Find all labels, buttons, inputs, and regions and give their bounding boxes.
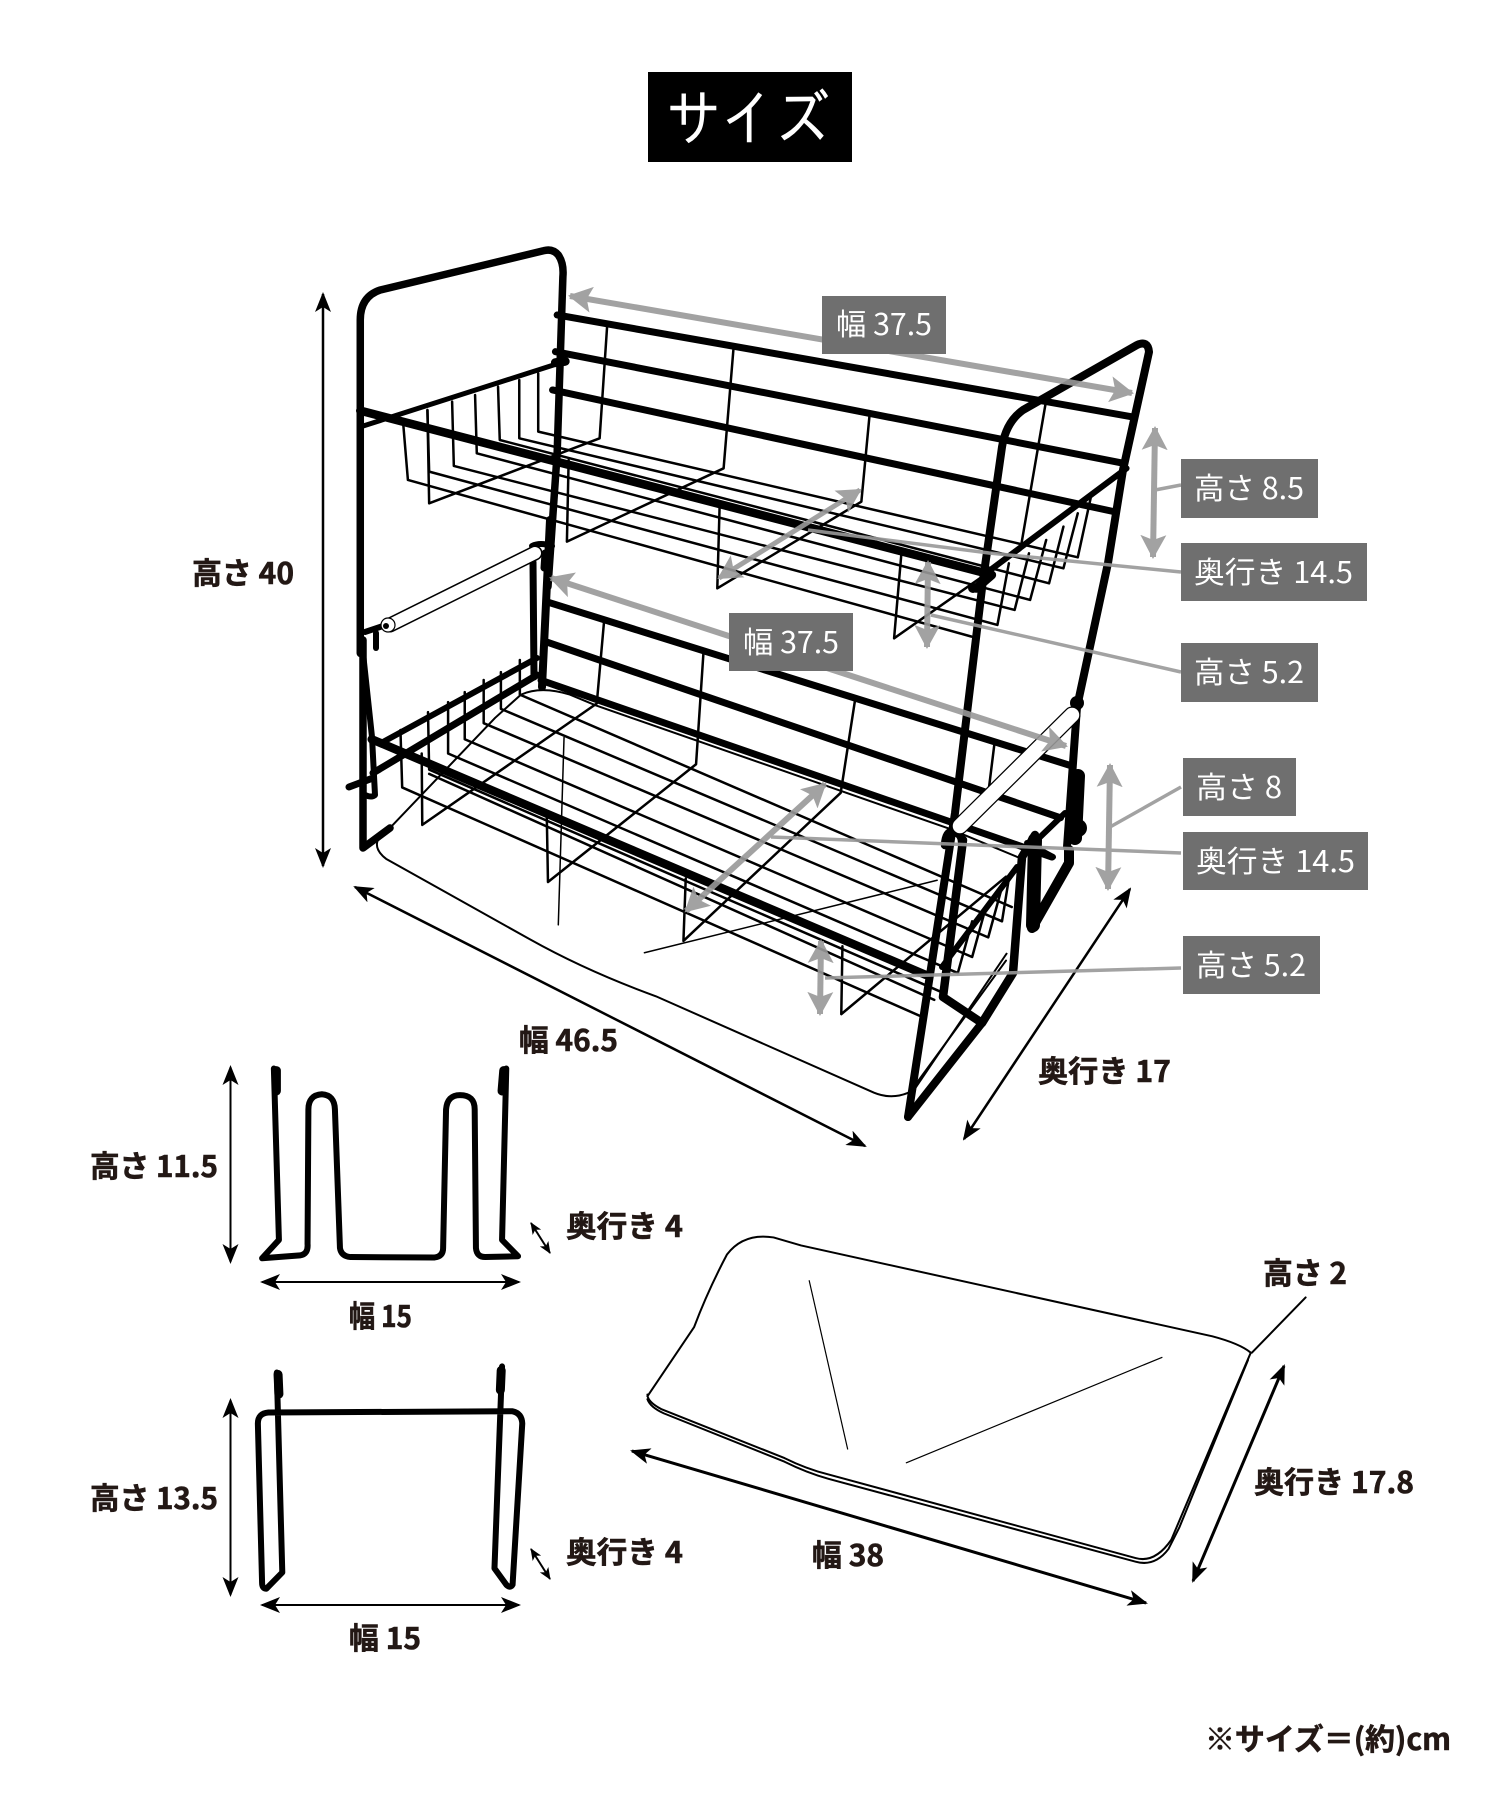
label: width 37.5 lower <box>729 613 853 671</box>
tray with dimensions <box>632 1237 1414 1603</box>
bracket B drawing <box>258 1366 522 1589</box>
label: depth 14.5 upper: 奥行き 14.5 <box>1194 548 1353 592</box>
label: width 37.5 upper: 幅 37.5 <box>836 300 932 344</box>
dimension: height 40: 高さ 40 <box>192 549 294 593</box>
label: depth 14.5 upper <box>1181 543 1367 601</box>
label: height 5.2 upper <box>1181 643 1318 702</box>
title: サイズ <box>666 86 830 148</box>
left frame and side bars <box>349 520 552 848</box>
label: height 8: 高さ 8 <box>1196 763 1282 807</box>
label: height 8.5 <box>1181 459 1318 518</box>
right frame <box>908 344 1149 1117</box>
bracket A with dimensions: 奥行き 4 <box>566 1202 683 1246</box>
gray dimension arrows <box>551 296 1181 1014</box>
right frame joints <box>968 583 1087 837</box>
label: height 8 <box>1183 758 1296 816</box>
dimension: width 46.5 <box>355 887 865 1146</box>
dimension: depth 17: 奥行き 17 <box>1038 1047 1171 1091</box>
bracket A with dimensions <box>90 1067 683 1336</box>
label: height 5.2 upper: 高さ 5.2 <box>1194 648 1304 692</box>
label: depth 14.5 lower <box>1183 832 1368 890</box>
dimension: depth 17 <box>964 889 1171 1139</box>
bar over towel rod end <box>1027 843 1053 857</box>
tray inner edge at right <box>912 953 1007 1093</box>
label: height 5.2 lower: 高さ 5.2 <box>1196 941 1306 985</box>
tray with dimensions: 奥行き 17.8 <box>1254 1458 1414 1502</box>
bracket B with dimensions: 幅 15 <box>349 1614 421 1658</box>
label: width 37.5 upper <box>822 296 946 354</box>
label: width 37.5 lower: 幅 37.5 <box>743 618 839 662</box>
bracket B with dimensions: 高さ 13.5 <box>90 1474 218 1518</box>
left towel rod <box>381 553 535 632</box>
tray with dimensions: 高さ 2 <box>1263 1249 1347 1293</box>
title <box>648 72 852 162</box>
upper section of rack <box>360 250 1131 653</box>
right towel rod <box>960 715 1072 826</box>
main rack line drawing <box>349 250 1149 1117</box>
tray arrows <box>632 1366 1284 1603</box>
dimension: width 46.5: 幅 46.5 <box>519 1016 618 1060</box>
bracket A with dimensions: 幅 15 <box>349 1292 412 1336</box>
bracket A arrows <box>230 1067 550 1282</box>
tray with dimensions: 幅 38 <box>812 1531 884 1575</box>
bracket A with dimensions: 高さ 11.5 <box>90 1142 218 1186</box>
bracket B arrows <box>230 1400 550 1605</box>
lower section of rack <box>372 602 1072 1016</box>
label: depth 14.5 lower: 奥行き 14.5 <box>1196 837 1355 881</box>
bracket B with dimensions: 奥行き 4 <box>566 1528 683 1572</box>
footnote: ※サイズ＝(約)cm <box>1205 1715 1451 1759</box>
bracket B with dimensions <box>90 1366 683 1658</box>
tray under rack <box>377 690 1017 1096</box>
bracket A drawing <box>262 1069 518 1258</box>
tray drawing <box>647 1237 1306 1563</box>
label: height 5.2 lower <box>1183 936 1320 994</box>
label: height 8.5: 高さ 8.5 <box>1194 464 1304 508</box>
